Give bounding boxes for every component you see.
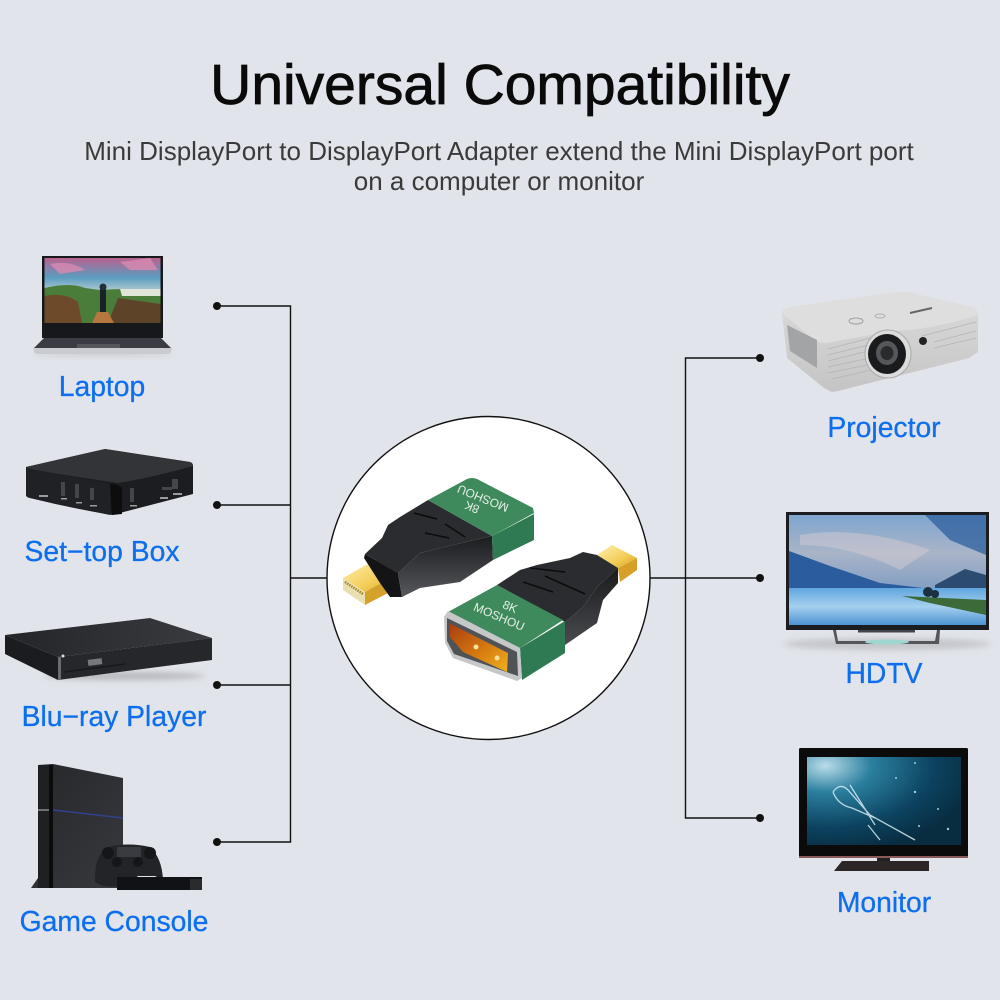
product: upper adapter: MOSHOU: [455, 482, 511, 515]
subtitle: Mini DisplayPort to DisplayPort Adapter extend the Mini DisplayPort port: [84, 136, 915, 166]
label: Set-top Box: Set−top Box: [25, 535, 179, 567]
icon: monitor: [799, 748, 968, 871]
connector lines: left devices: [213, 302, 330, 846]
label: Projector: Projector: [827, 411, 941, 443]
product: upper adapter: 8K: [463, 498, 481, 516]
title: Universal Compatibility: [210, 53, 790, 117]
label: Game Console: Game Console: [20, 905, 208, 937]
icon: projector: [782, 292, 978, 392]
icon: set-top box: [26, 449, 193, 515]
icon: laptop: [32, 256, 172, 356]
product: lower adapter: [444, 545, 637, 681]
connector lines: right devices: [650, 354, 764, 822]
subtitle: [84, 136, 915, 196]
panel: product circle: [327, 416, 650, 740]
icon: game console: [31, 764, 202, 890]
product: lower adapter: 8K: [501, 598, 520, 616]
label: HDTV: HDTV: [845, 657, 923, 689]
subtitle: on a computer or monitor: [354, 166, 645, 196]
label: Monitor: Monitor: [837, 886, 931, 918]
product: upper adapter: [343, 478, 534, 605]
label: Blu-ray Player: Blu−ray Player: [22, 700, 206, 732]
icon: HDTV: [783, 512, 991, 650]
label: Laptop: Laptop: [59, 370, 145, 402]
product: lower adapter: MOSHOU: [471, 600, 527, 634]
icon: Blu-ray player: [5, 618, 212, 680]
